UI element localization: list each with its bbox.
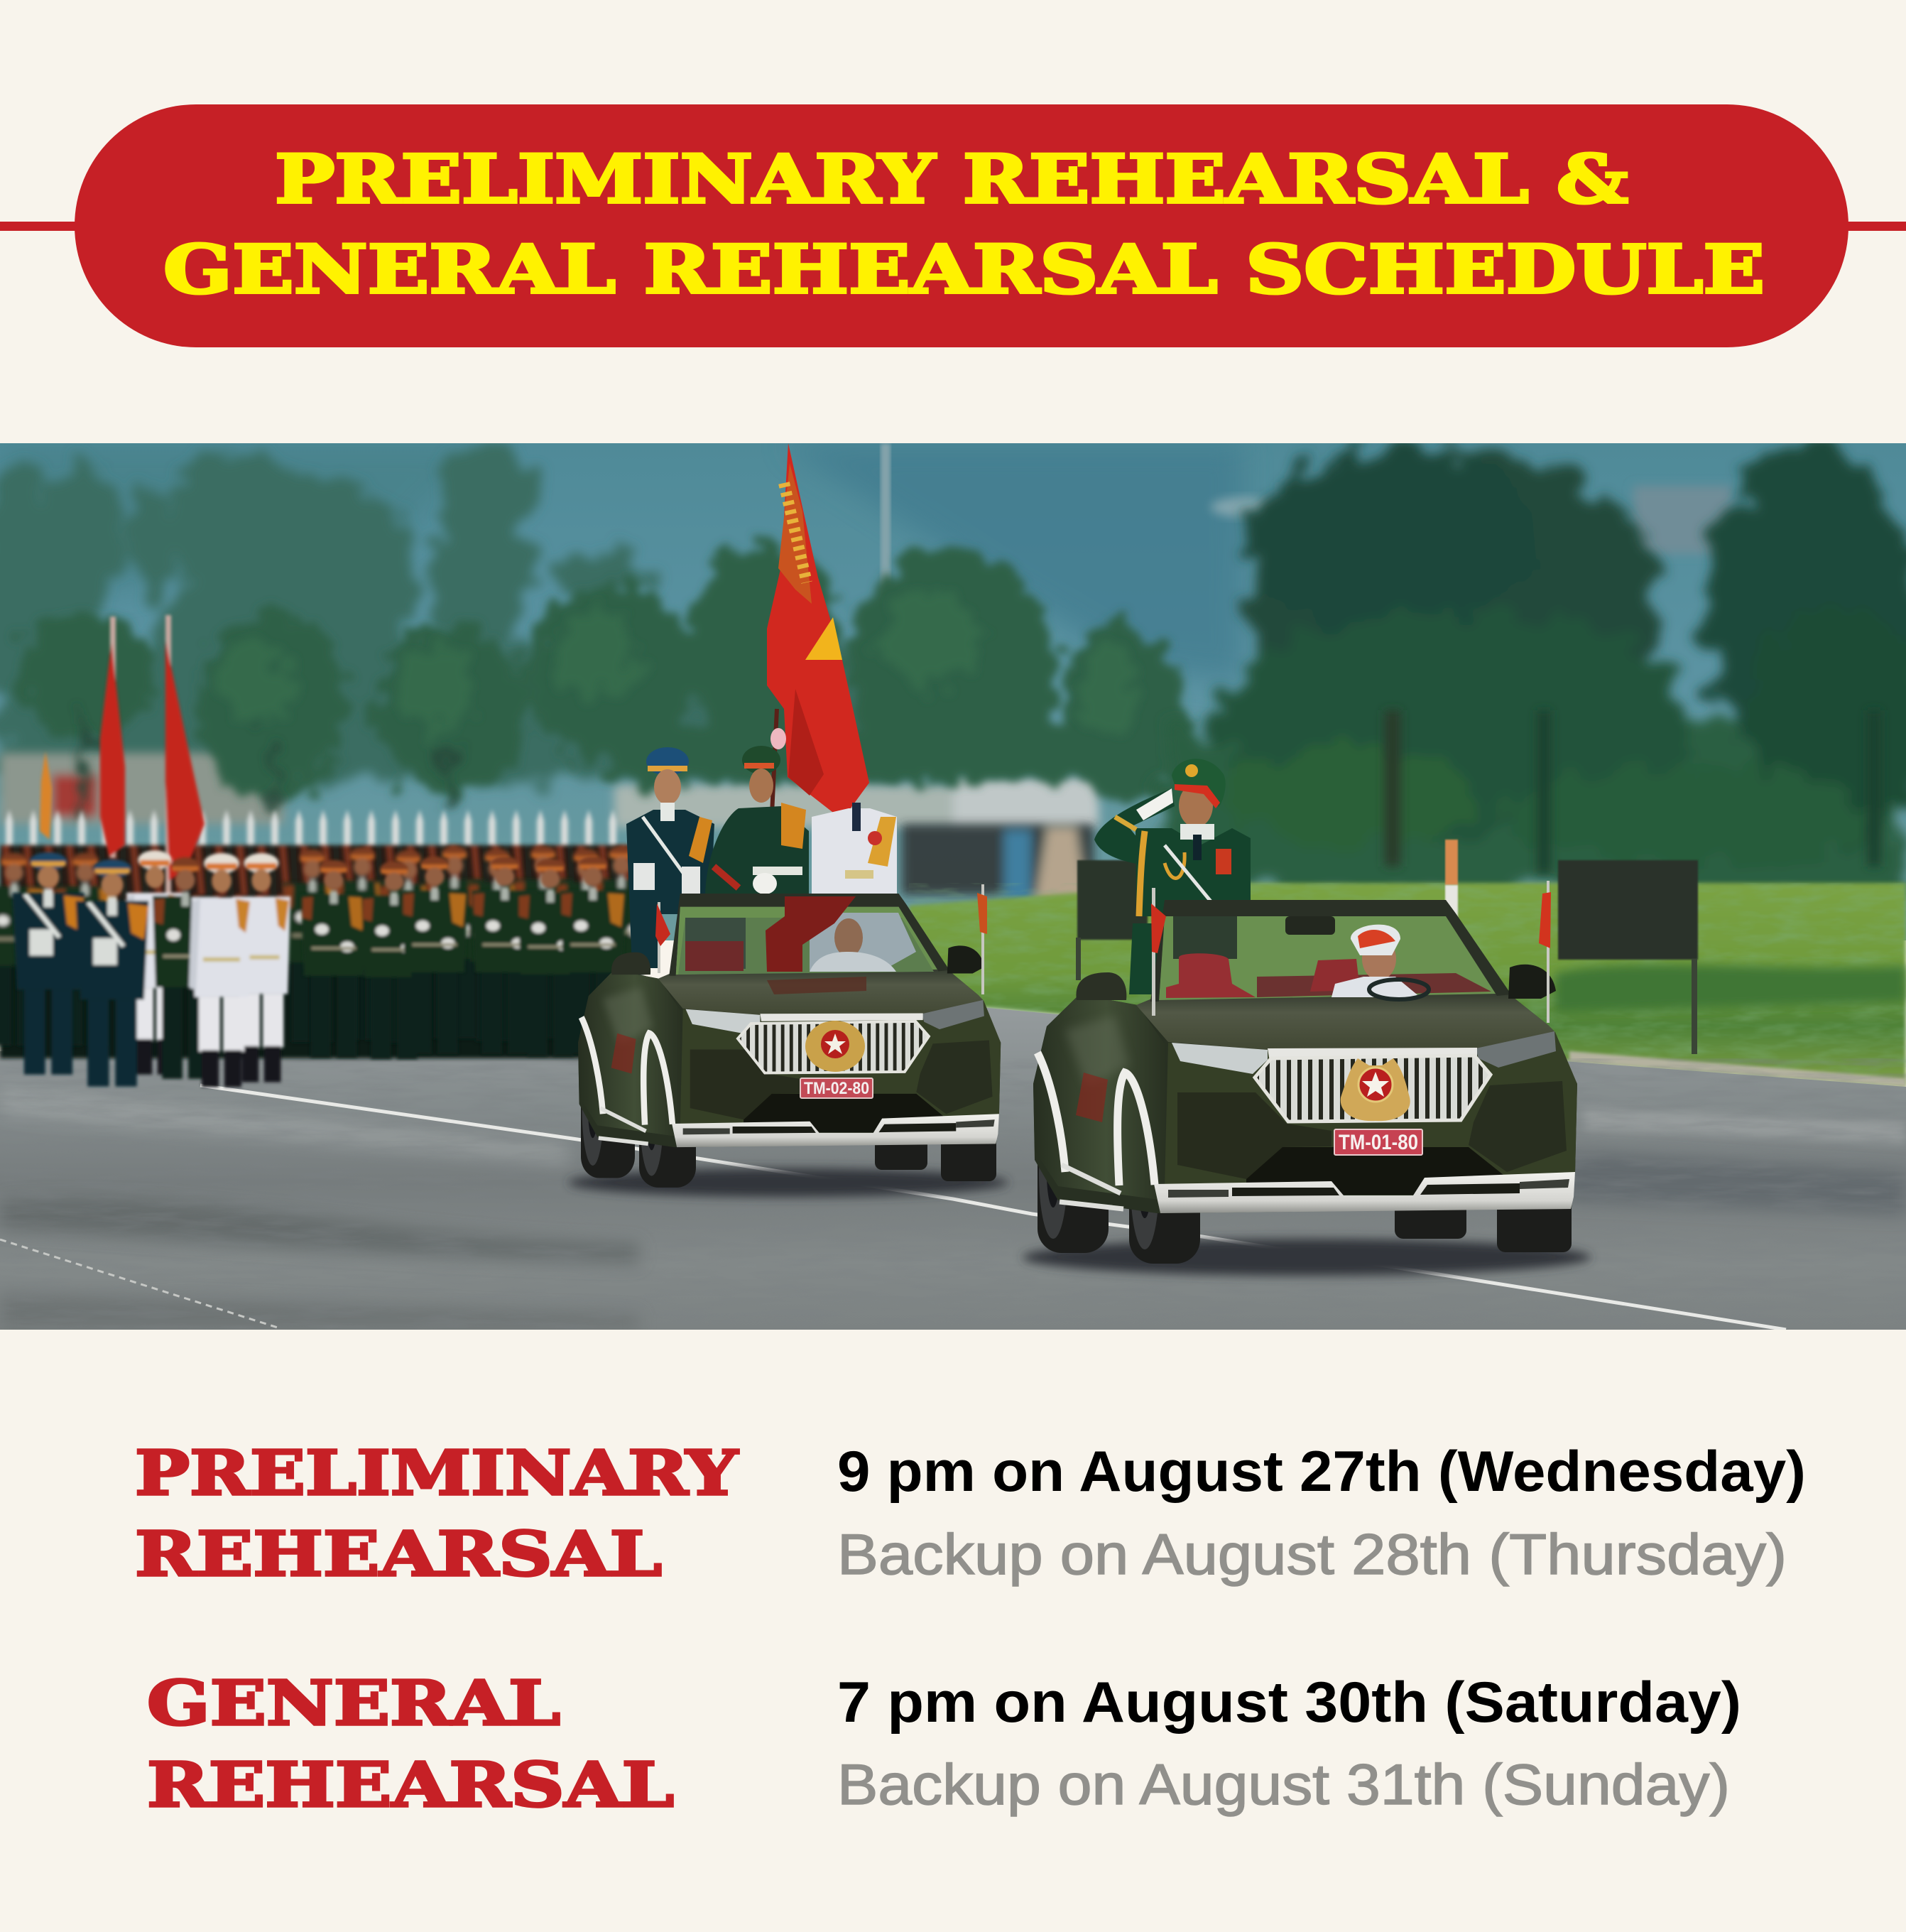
standing honor guards on second car [626, 728, 897, 968]
formation base [0, 845, 632, 1058]
front rank soldiers [12, 850, 290, 1087]
wheels of second car [581, 1038, 996, 1188]
marching formation [0, 615, 651, 1087]
interior and driver of lead car [1166, 916, 1491, 999]
pennants of lead car [1151, 881, 1551, 1023]
time: general backup date: Backup on August 31th (Sunday) [837, 1753, 1730, 1817]
photo: parade rehearsal with convertible cars [0, 443, 1906, 1330]
banner pill [75, 104, 1848, 347]
second car [578, 884, 1001, 1188]
title line 1: PRELIMINARY REHEARSAL & [275, 141, 1628, 219]
navy guard in white [812, 803, 897, 894]
small yellow and red flag [40, 751, 52, 840]
shadow beneath cars [568, 1168, 1591, 1276]
second rank [301, 857, 626, 1059]
tree trunks on the right [1385, 710, 1880, 874]
time: general main date: 7 pm on August 30th (Saturday) [837, 1671, 1741, 1735]
wall and distant buildings [0, 753, 1099, 828]
wheels of lead car [1038, 1094, 1572, 1264]
hazy background trees [0, 447, 923, 781]
dashed edge line [0, 1239, 280, 1328]
schedule: general rehearsal [147, 1668, 1741, 1821]
label: general rehearsal: GENERAL [147, 1668, 560, 1740]
pennants of second car [655, 884, 987, 994]
title banner [0, 104, 1906, 347]
body of lead car [1033, 900, 1577, 1213]
label: general rehearsal: REHEARSAL [147, 1749, 674, 1821]
large dark trees on the right [1165, 444, 1906, 895]
time: preliminary main date: 9 pm on August 27th (Wednesday) [837, 1440, 1806, 1504]
grille of lead car [1255, 1055, 1491, 1122]
grass embankment [909, 883, 1906, 1087]
interior and driver of second car [678, 896, 934, 994]
left red flag [100, 617, 125, 858]
label: general rehearsal [147, 1668, 674, 1821]
label: preliminary rehearsal [135, 1438, 739, 1590]
banner side rule [0, 222, 1906, 231]
large national flag on pole [767, 443, 869, 874]
ground force guard [705, 728, 809, 894]
rifle plumes [0, 810, 632, 852]
emblem of second car [805, 1021, 865, 1072]
body of second car [578, 894, 1001, 1147]
lane line [200, 1085, 1786, 1330]
schedule: preliminary rehearsal [135, 1438, 1806, 1590]
foreground trees [14, 543, 1193, 799]
light pole [879, 443, 892, 584]
road surface [0, 1002, 1906, 1330]
saluting officer on lead car [1094, 759, 1251, 994]
plate of lead car: TM-01-80 [1339, 1131, 1418, 1154]
signboards and posts [1076, 840, 1698, 1054]
rear ranks [0, 846, 651, 1046]
grille of second car [738, 1021, 929, 1073]
label: preliminary rehearsal: REHEARSAL [135, 1519, 662, 1590]
spectators in the distance [902, 824, 1094, 902]
second red flag [165, 615, 205, 899]
air force guard [626, 747, 714, 968]
time: preliminary backup date: Backup on August 28th (Thursday) [837, 1523, 1787, 1587]
asphalt texture [0, 1058, 1906, 1330]
title line 2: GENERAL REHEARSAL SCHEDULE [163, 231, 1765, 309]
sky and mountains [0, 443, 1906, 940]
foliage highlights and trunks [80, 590, 1136, 810]
emblem of lead car [1341, 1058, 1410, 1121]
lead car [1033, 881, 1577, 1264]
plate of second car: TM-02-80 [804, 1079, 869, 1098]
label: preliminary rehearsal: PRELIMINARY [135, 1438, 739, 1509]
